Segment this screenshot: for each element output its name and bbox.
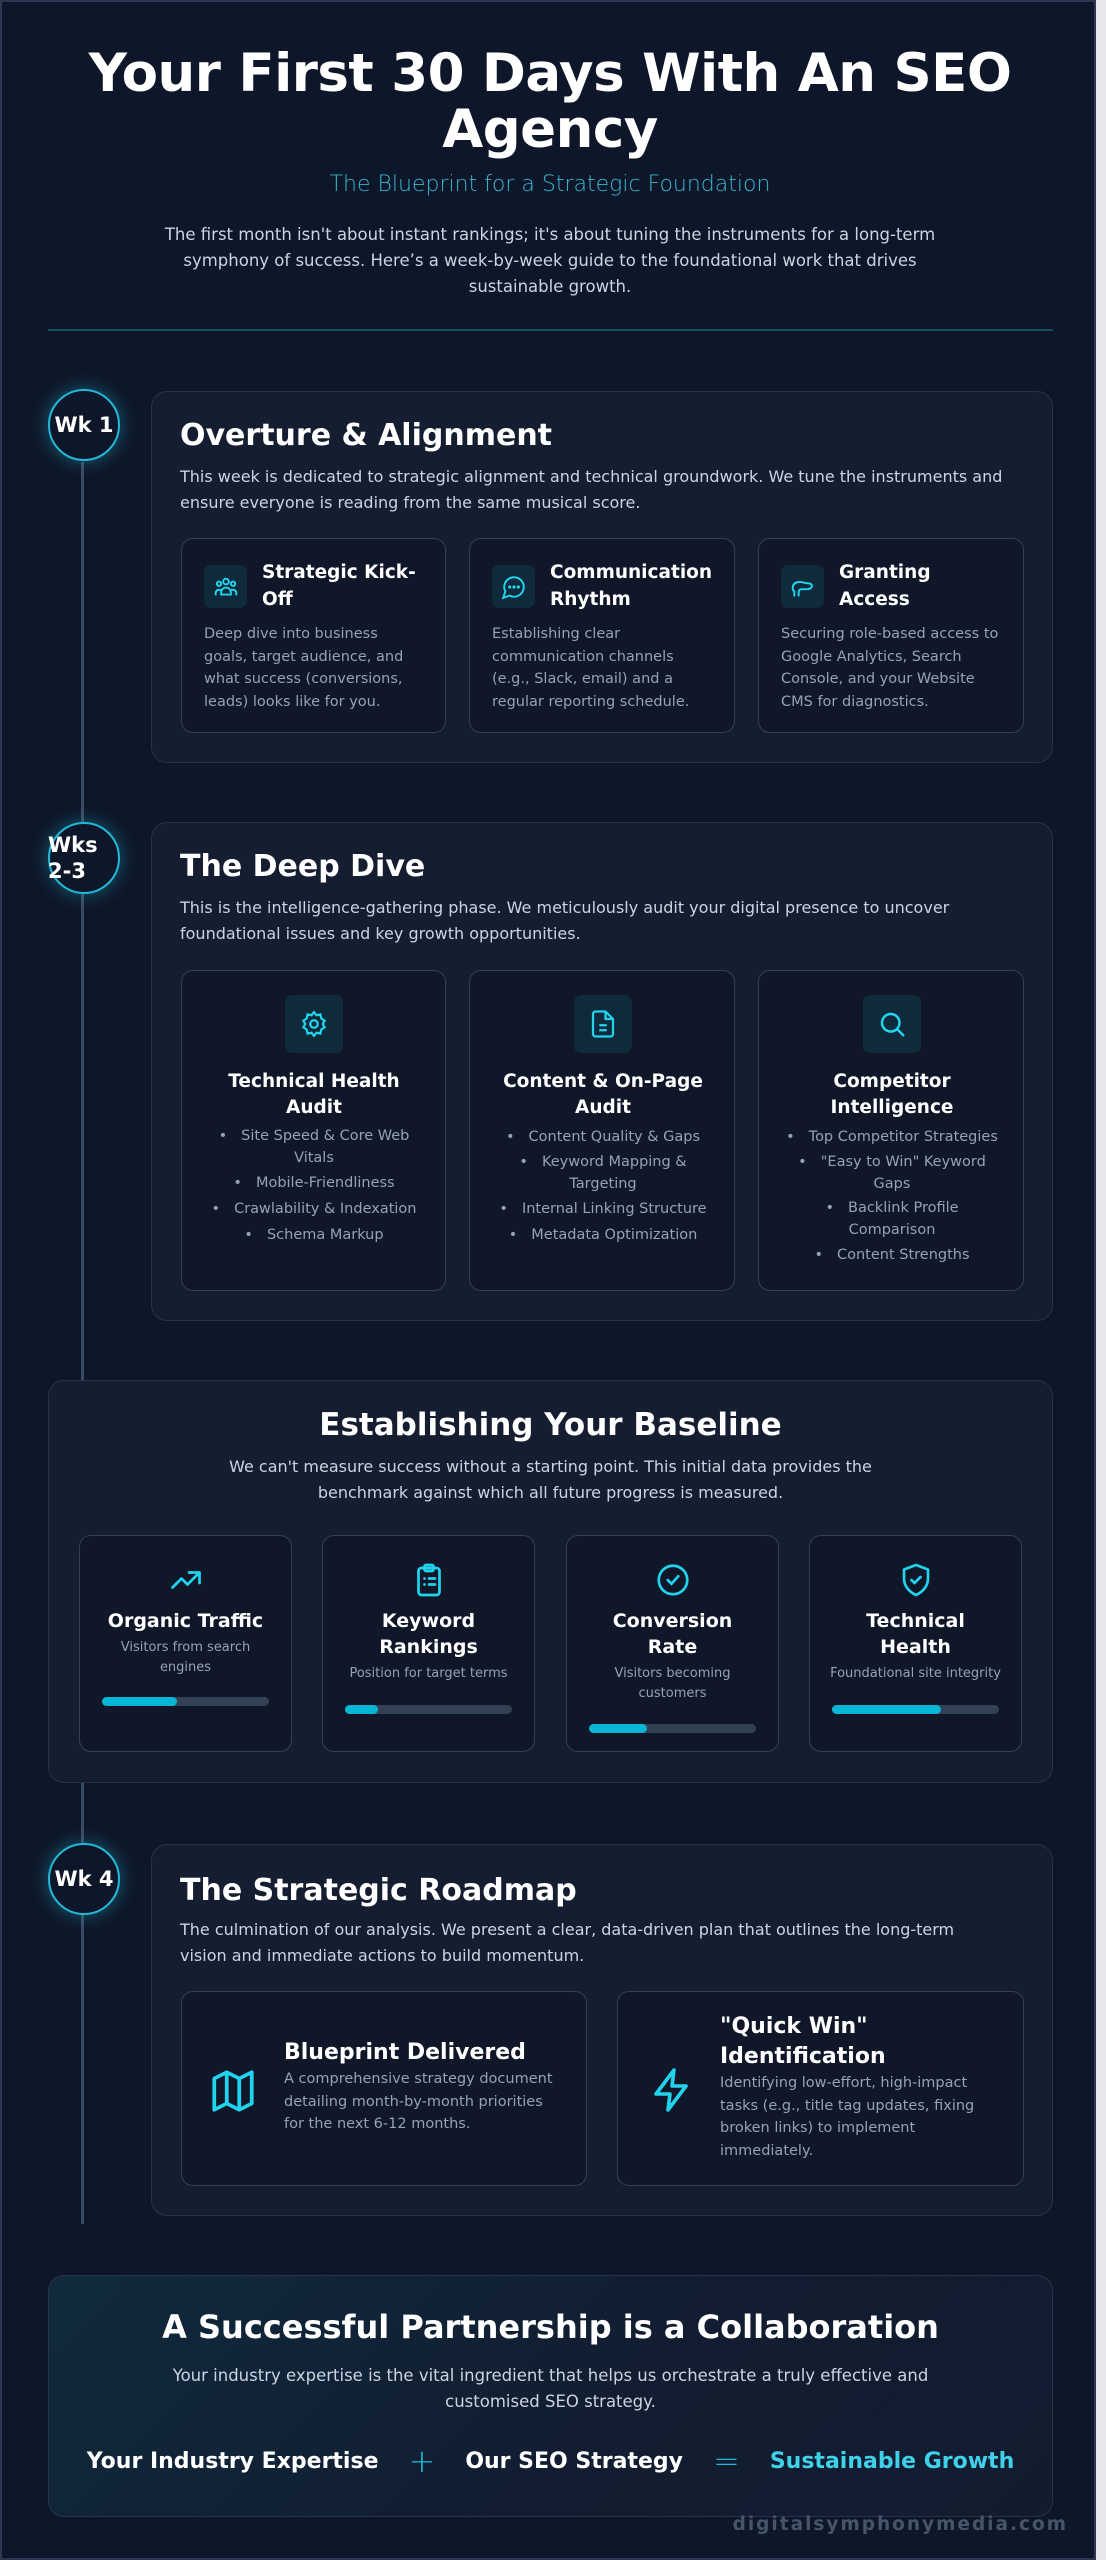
card: competitor intelligence: Competitor Intelligence xyxy=(831,1071,953,1118)
icon: check circle xyxy=(657,1564,689,1596)
card: quick win xyxy=(617,1991,1024,2186)
week 2-3 marker: Wks xyxy=(48,833,98,857)
card: technical health audit: Site Speed & Core Web Vitals xyxy=(241,1128,409,1166)
card: blueprint delivered: A comprehensive strategy document detailing month-by-month priorities for the next 6-12 months. xyxy=(284,2071,553,2132)
icon: map xyxy=(212,2070,254,2112)
metric: technical health: Foundational site integrity xyxy=(830,1666,1001,1681)
icon: trend xyxy=(171,1571,201,1589)
card: content audit: Metadata Optimization xyxy=(531,1227,697,1243)
card: content audit xyxy=(469,970,735,1291)
panel: deep dive xyxy=(151,822,1053,1321)
heading: A Successful Partnership is a Collaboration xyxy=(162,2308,939,2346)
card: competitor intelligence: Backlink Profile xyxy=(848,1200,959,1216)
icon: search xyxy=(863,995,921,1053)
heading: Establishing Your Baseline xyxy=(319,1407,782,1443)
card: granting access: Securing role-based access to Google Analytics, Search Console, and your Website CMS for diagnostics. xyxy=(781,626,998,710)
icon: document xyxy=(574,995,632,1053)
metric: organic traffic: Organic Traffic xyxy=(108,1610,263,1632)
card: competitor intelligence: "Easy to Win" Keyword xyxy=(821,1154,986,1170)
timeline line xyxy=(81,462,84,2224)
icon: access xyxy=(781,565,824,608)
panel: collaboration xyxy=(48,2275,1053,2517)
description: This is the intelligence-gathering phase. We meticulously audit your digital presence to uncover foundational issues and key growth opportunities. xyxy=(180,898,949,943)
card: communication rhythm: Communication Rhythm xyxy=(550,562,712,610)
metric: conversion rate: Conversion Rate xyxy=(613,1610,732,1658)
card: competitor intelligence: Top Competitor Strategies xyxy=(809,1129,998,1145)
description: Your industry expertise is the vital ingredient that helps us orchestrate a truly effective and customised SEO strategy. xyxy=(173,2366,928,2411)
metric: conversion rate xyxy=(566,1535,779,1752)
card: technical health audit: Crawlability & Indexation xyxy=(234,1201,416,1217)
icon: gear xyxy=(285,995,343,1053)
subtitle: The Blueprint for a Strategic Foundation xyxy=(330,172,770,197)
card: communication rhythm xyxy=(469,538,735,733)
card: competitor intelligence: Comparison xyxy=(849,1222,935,1238)
panel: baseline xyxy=(48,1380,1053,1783)
card: content audit: Content Quality & Gaps xyxy=(529,1129,700,1145)
card: technical health audit: Mobile-Friendliness xyxy=(256,1175,395,1191)
metric: organic traffic xyxy=(79,1535,292,1752)
metric: keyword rankings xyxy=(322,1535,535,1752)
card: competitor intelligence: Content Strengths xyxy=(837,1247,970,1263)
card: blueprint delivered: Blueprint Delivered xyxy=(284,2040,526,2065)
icon: people xyxy=(204,565,247,608)
description: We can't measure success without a starting point. This initial data provides the benchmark against which all future progress is measured. xyxy=(229,1457,872,1502)
icon: chat xyxy=(492,565,535,608)
card: competitor intelligence xyxy=(758,970,1024,1291)
metric: keyword rankings: Keyword Rankings xyxy=(379,1610,478,1658)
week 4 marker: Wk 4 xyxy=(54,1867,114,1891)
panel: week 1 overture xyxy=(151,391,1053,763)
heading: The Strategic Roadmap xyxy=(180,1873,577,1908)
description: The culmination of our analysis. We present a clear, data-driven plan that outlines the long-term vision and immediate actions to build momentum. xyxy=(180,1920,954,1965)
week 1 marker xyxy=(48,389,120,461)
week 2-3 marker xyxy=(48,822,120,894)
card: technical health audit xyxy=(181,970,446,1291)
icon: shield xyxy=(902,1564,930,1596)
description: This week is dedicated to strategic alignment and technical groundwork. We tune the instruments and ensure everyone is reading from the same musical score. xyxy=(180,467,1002,512)
icon: lightning xyxy=(654,2068,688,2112)
week 4 marker xyxy=(48,1843,120,1915)
equation: Sustainable Growth xyxy=(770,2448,1014,2474)
equation: Our SEO Strategy xyxy=(465,2448,683,2474)
card: technical health audit: Technical Health Audit xyxy=(228,1071,400,1118)
card: granting access: Granting Access xyxy=(839,562,931,610)
equation: Your Industry Expertise xyxy=(87,2448,378,2474)
equation: + xyxy=(408,2442,435,2480)
card: content audit: Internal Linking Structure xyxy=(522,1201,707,1217)
equation xyxy=(86,2442,1014,2480)
card: quick win: "Quick Win" Identification xyxy=(720,2014,886,2069)
intro paragraph: The first month isn't about instant rankings; it's about tuning the instruments for a long-term symphony of success. Here’s a week-by-week guide to the foundational work that drives sustainable growth. xyxy=(165,225,935,296)
card: content audit: Keyword Mapping & Targeting xyxy=(542,1154,687,1192)
title: Your First 30 Days With An SEO Agency xyxy=(89,43,1011,160)
metric: keyword rankings: Position for target terms xyxy=(349,1666,508,1681)
equation: = xyxy=(713,2442,740,2480)
metric: organic traffic: Visitors from search engines xyxy=(121,1640,250,1675)
card: competitor intelligence: Gaps xyxy=(874,1176,910,1192)
card: strategic kick-off: Deep dive into business goals, target audience, and what success (conversions, leads) looks like for you. xyxy=(204,626,403,710)
card: technical health audit: Schema Markup xyxy=(267,1227,384,1243)
card: content audit: Content & On-Page Audit xyxy=(503,1071,703,1118)
card: strategic kick-off: Strategic Kick-Off xyxy=(262,562,416,610)
panel: strategic roadmap xyxy=(151,1844,1053,2216)
card: blueprint delivered xyxy=(181,1991,587,2186)
heading: The Deep Dive xyxy=(180,849,425,884)
week 2-3 marker: 2-3 xyxy=(48,859,86,883)
metric: conversion rate: Visitors becoming customers xyxy=(614,1666,731,1701)
metric: technical health xyxy=(809,1535,1022,1752)
metric: technical health: Technical Health xyxy=(866,1610,965,1658)
heading: Overture & Alignment xyxy=(180,418,552,453)
watermark: digitalsymphonymedia.com xyxy=(733,2514,1068,2535)
icon: clipboard xyxy=(417,1564,441,1596)
card: quick win: Identifying low-effort, high-impact tasks (e.g., title tag updates, fixing broken links) to implement immediately. xyxy=(720,2075,974,2158)
card: granting access xyxy=(758,538,1024,733)
week 1 marker: Wk 1 xyxy=(54,413,114,437)
card: communication rhythm: Establishing clear communication channels (e.g., Slack, email) and a regular reporting schedule. xyxy=(492,626,689,710)
card: strategic kick-off xyxy=(181,538,446,733)
